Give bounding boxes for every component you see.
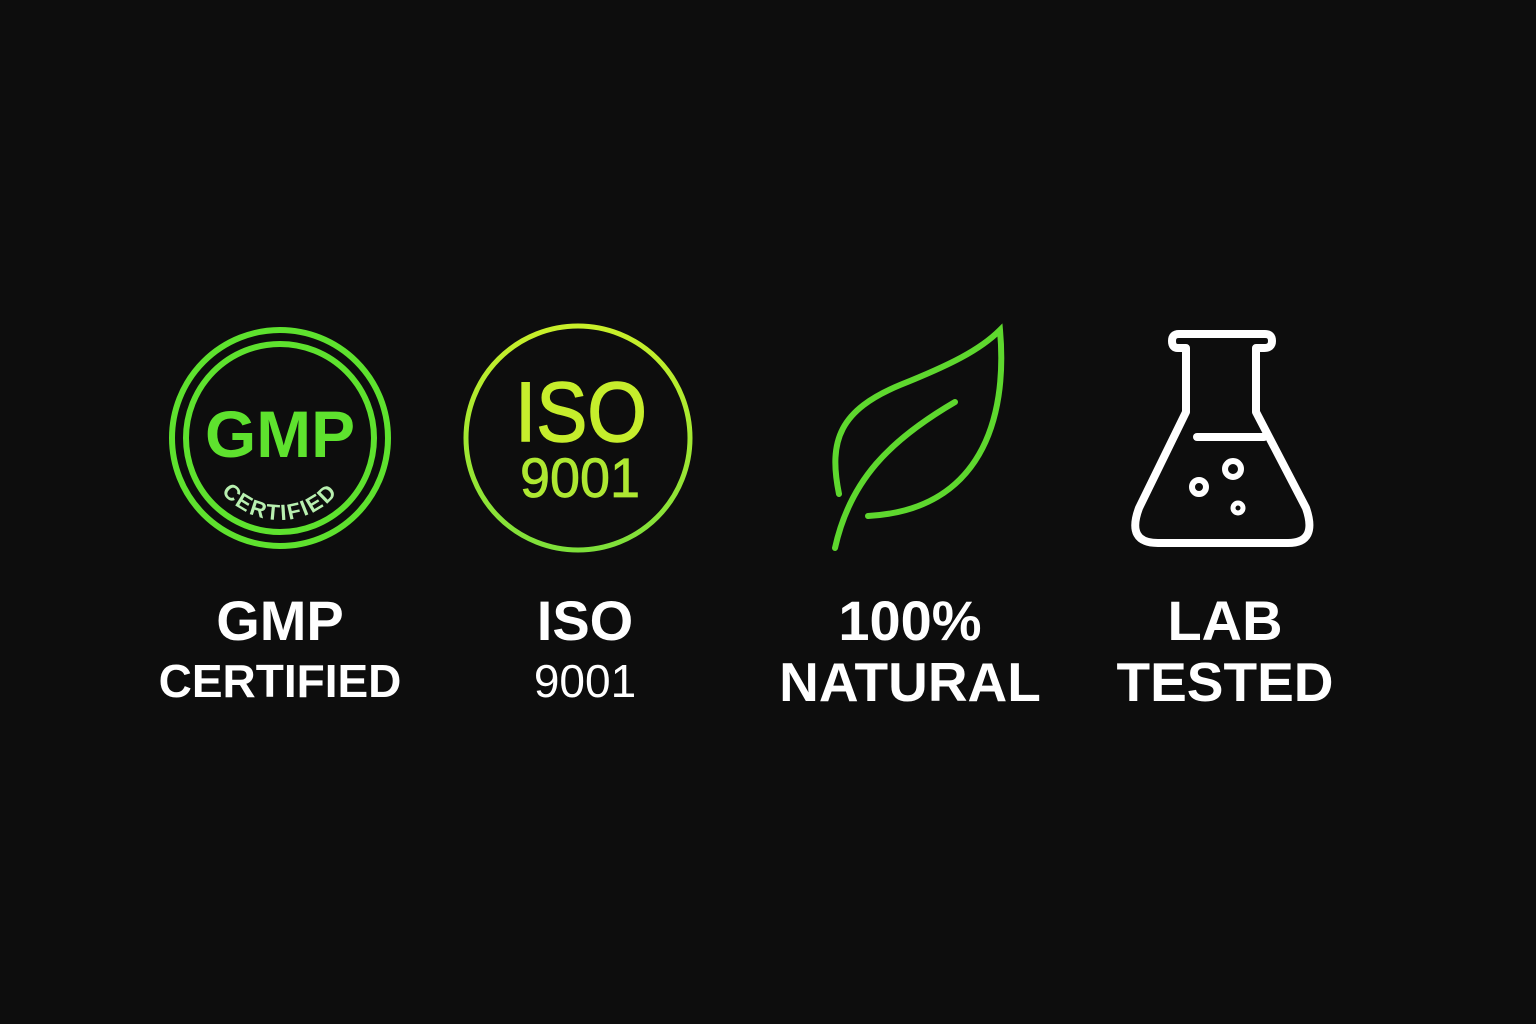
icon: flask	[1135, 334, 1309, 543]
label: GMP certified	[159, 589, 401, 707]
label: lab tested: TESTED	[1117, 651, 1333, 713]
label: ISO 9001: ISO	[537, 589, 633, 652]
icon: GMP seal: CERTIFIED	[224, 484, 334, 520]
label: lab tested: LAB	[1167, 589, 1283, 652]
icon: ISO seal: ISO	[515, 365, 647, 459]
label: 100% natural: NATURAL	[779, 651, 1041, 713]
label: 100% natural	[779, 589, 1041, 713]
icon: ISO seal	[466, 326, 690, 550]
label: ISO 9001	[534, 589, 636, 707]
label: 100% natural: 100%	[838, 589, 982, 652]
icon: leaf	[835, 330, 1001, 548]
icon: GMP seal	[169, 327, 391, 549]
label: GMP certified: GMP	[216, 589, 344, 652]
icon: GMP seal: GMP	[205, 397, 355, 471]
label: lab tested	[1117, 589, 1333, 713]
label: GMP certified: CERTIFIED	[159, 655, 401, 707]
label: ISO 9001: 9001	[534, 655, 636, 707]
icon: ISO seal: 9001	[520, 446, 640, 509]
